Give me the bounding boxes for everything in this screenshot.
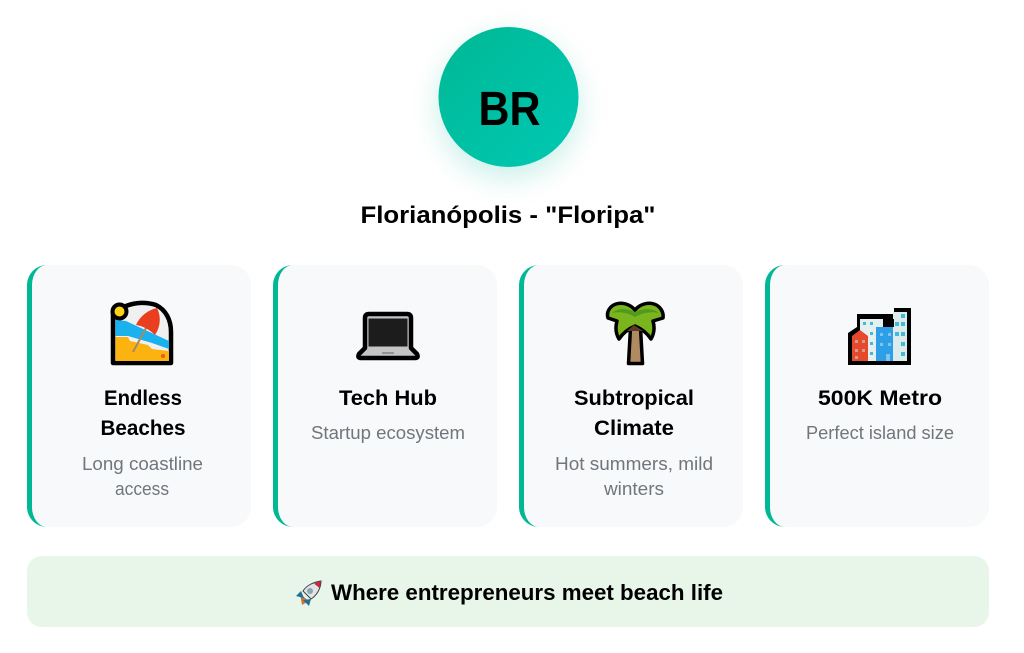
icon: city buildings bbox=[848, 308, 911, 365]
heading: Climate bbox=[594, 417, 674, 440]
callout banner bbox=[27, 556, 989, 627]
heading bbox=[574, 387, 694, 440]
callout text: Where entrepreneurs meet beach life bbox=[331, 580, 723, 605]
heading: Endless bbox=[104, 387, 182, 410]
avatar badge bbox=[438, 27, 578, 177]
description: Hot summers, mild bbox=[555, 454, 713, 474]
heading bbox=[100, 387, 186, 440]
heading: Beaches bbox=[100, 417, 186, 440]
heading: Tech Hub bbox=[339, 387, 437, 410]
icon: laptop bbox=[358, 314, 418, 358]
description: Long coastline bbox=[82, 454, 203, 474]
icon: palm tree bbox=[607, 303, 663, 364]
heading: Subtropical bbox=[574, 387, 694, 410]
icon: beach umbrella bbox=[110, 302, 171, 363]
panel: tech hub bbox=[273, 265, 497, 527]
panel: endless beaches bbox=[27, 265, 251, 527]
heading: 500K Metro bbox=[818, 387, 942, 410]
description: winters bbox=[603, 479, 664, 499]
description bbox=[555, 454, 713, 499]
title: Florianópolis - "Floripa" bbox=[360, 202, 656, 229]
panel: 500K metro bbox=[765, 265, 989, 527]
description: access bbox=[115, 479, 169, 499]
panel: subtropical climate bbox=[519, 265, 743, 527]
description: Perfect island size bbox=[806, 423, 954, 443]
icon: rocket bbox=[296, 581, 321, 606]
description bbox=[82, 454, 203, 499]
description: Startup ecosystem bbox=[311, 423, 465, 443]
avatar badge: BR bbox=[478, 83, 540, 136]
